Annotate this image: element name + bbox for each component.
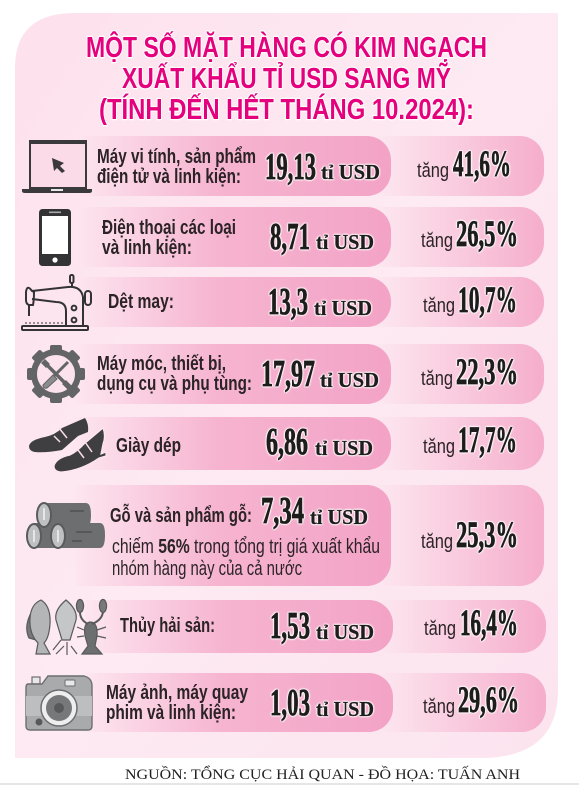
row: computers: 19,13 <box>265 146 316 188</box>
icon: sewing machine <box>22 275 91 330</box>
icon: logs <box>27 503 105 548</box>
row: machinery: Máy móc, thiết bị, <box>97 353 226 375</box>
title <box>86 30 487 126</box>
icon: camera <box>26 676 92 730</box>
row: phones: 8,71 <box>270 216 310 258</box>
row: wood: tỉ USD <box>310 505 368 529</box>
row: wood: 25,3% <box>456 515 518 556</box>
note: share of national exports <box>112 536 380 580</box>
row: phones: tăng <box>421 230 453 252</box>
row: machinery: tăng <box>421 368 453 390</box>
source line: NGUỒN: TỔNG CỤC HẢI QUAN - ĐỒ HỌA: TUẤN ANH <box>125 765 520 783</box>
row: wood: tăng <box>421 531 453 553</box>
row: cameras <box>26 673 546 732</box>
row: textiles: 13,3 <box>268 281 308 323</box>
row: textiles <box>22 275 544 330</box>
row: computers <box>22 136 544 196</box>
row: cameras: tỉ USD <box>316 697 374 721</box>
row: phones: Điện thoại các loại <box>102 217 236 239</box>
row: cameras: 1,03 <box>270 682 310 724</box>
row: cameras: phim và linh kiện: <box>106 702 236 724</box>
icon: phone <box>39 209 71 266</box>
row: computers: Máy vi tính, sản phẩm <box>97 146 256 168</box>
icon: shoes <box>29 418 106 472</box>
row: textiles: tăng <box>423 295 455 317</box>
row: textiles: tỉ USD <box>314 296 372 320</box>
row: phones: tỉ USD <box>316 230 374 254</box>
row: footwear: Giày dép <box>116 435 181 457</box>
row: footwear: 17,7% <box>458 420 517 461</box>
row: seafood: 1,53 <box>270 605 310 647</box>
row: phones: 26,5% <box>456 214 518 255</box>
row: seafood: tỉ USD <box>316 620 374 644</box>
title: MỘT SỐ MẶT HÀNG CÓ KIM NGẠCH <box>86 30 487 64</box>
row: wood <box>27 485 544 586</box>
row: cameras: tăng <box>423 696 455 718</box>
note: share of national exports: nhóm hàng này của cả nước <box>112 558 302 580</box>
row: cameras: 29,6% <box>458 680 519 721</box>
row: phones <box>39 207 544 267</box>
row: footwear <box>29 417 544 472</box>
row: computers: tăng <box>417 160 449 182</box>
row: seafood: Thủy hải sản: <box>120 615 215 637</box>
row: footwear: tăng <box>423 436 455 458</box>
row: footwear: 6,86 <box>266 421 308 463</box>
row: seafood <box>27 600 546 655</box>
icon: gear with tools <box>27 345 85 403</box>
row: phones: và linh kiện: <box>102 237 192 259</box>
row: textiles: 10,7% <box>458 280 517 321</box>
title: XUẤT KHẨU TỈ USD SANG MỸ <box>122 61 451 95</box>
row: computers: điện tử và linh kiện: <box>97 166 241 188</box>
row: textiles: Dệt may: <box>108 291 174 313</box>
row: seafood: tăng <box>424 618 456 640</box>
row: wood: Gỗ và sản phẩm gỗ: <box>110 503 252 527</box>
icon: laptop <box>22 140 92 193</box>
row: seafood: 16,4% <box>460 603 518 644</box>
row: computers: 41,6% <box>453 144 511 185</box>
row: machinery: 22,3% <box>456 352 518 393</box>
row: machinery <box>27 344 544 404</box>
row: machinery: tỉ USD <box>320 368 379 392</box>
title: (TÍNH ĐẾN HẾT THÁNG 10.2024): <box>99 92 474 126</box>
row: machinery: dụng cụ và phụ tùng: <box>97 373 252 395</box>
row: computers: tỉ USD <box>321 160 380 184</box>
note: share of national exports: chiếm 56% trong tổng trị giá xuất khẩu <box>112 536 380 558</box>
row: wood: 7,34 <box>261 490 304 532</box>
row: machinery: 17,97 <box>261 353 315 395</box>
row: footwear: tỉ USD <box>315 436 373 460</box>
row: cameras: Máy ảnh, máy quay <box>106 682 249 704</box>
icon: fish, squid, lobster <box>27 600 107 655</box>
